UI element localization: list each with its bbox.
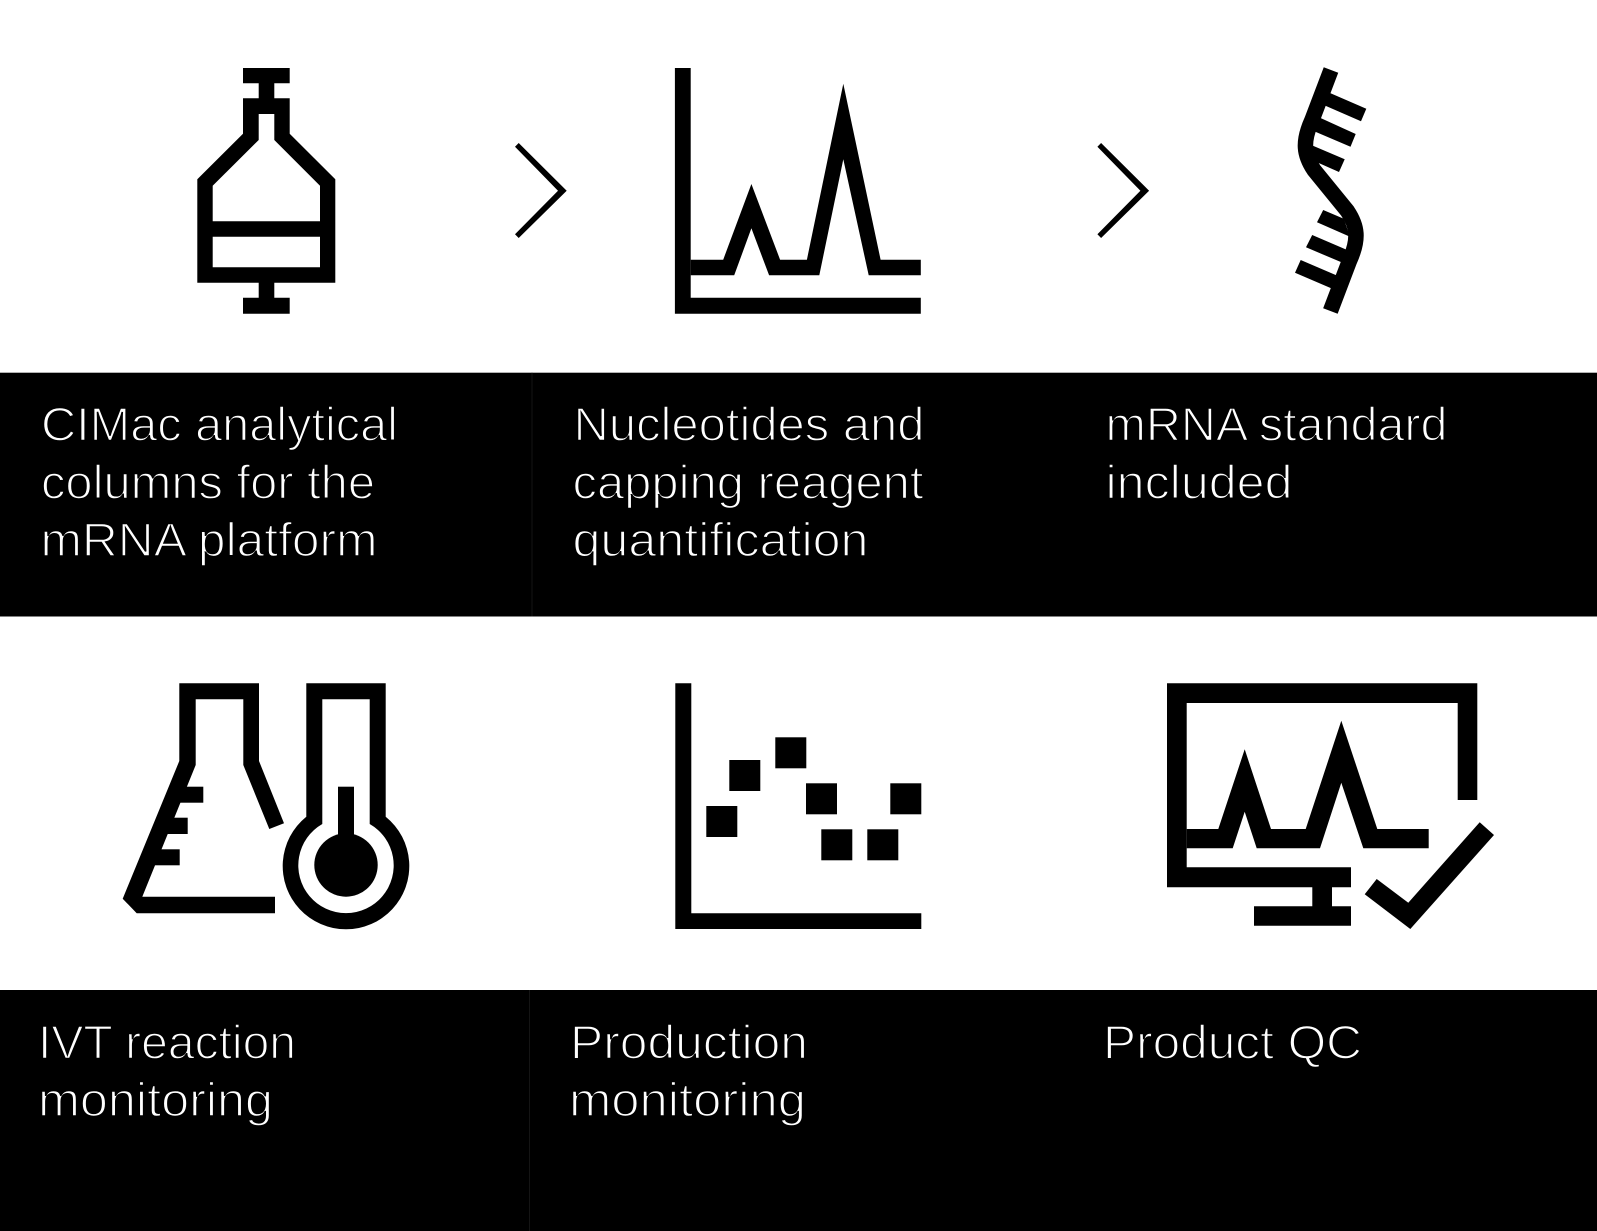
caption: CIMac analytical columns: columns for the <box>41 456 375 508</box>
icon: flask and thermometer <box>123 683 409 929</box>
caption: nucleotides and capping reagent: quantification <box>572 513 868 566</box>
caption: CIMac analytical columns: CIMac analytical <box>41 398 398 450</box>
arrow: second step to third step <box>1097 143 1149 238</box>
icon: mRNA strand <box>1295 70 1366 311</box>
caption: production monitoring: Production <box>570 1016 808 1068</box>
caption: IVT reaction monitoring <box>38 1016 296 1126</box>
caption: IVT reaction monitoring: monitoring <box>38 1073 273 1126</box>
caption: nucleotides and capping reagent: Nucleotides and <box>574 398 924 450</box>
panel: top captions band <box>0 373 1597 616</box>
caption: nucleotides and capping reagent: capping reagent <box>572 456 924 508</box>
caption: mRNA standard included: included <box>1106 456 1292 508</box>
caption: production monitoring <box>569 1016 808 1126</box>
caption: CIMac analytical columns <box>40 398 398 566</box>
caption: production monitoring: monitoring <box>569 1073 806 1126</box>
caption: mRNA standard included <box>1106 398 1448 508</box>
panel: bottom captions band <box>0 990 1597 1231</box>
arrow: first step to second step <box>515 143 567 238</box>
caption: mRNA standard included: mRNA standard <box>1106 398 1448 450</box>
icon: CIMac column <box>197 68 335 314</box>
caption: nucleotides and capping reagent <box>572 398 924 566</box>
caption: CIMac analytical columns: mRNA platform <box>40 513 378 566</box>
caption: product QC: Product QC <box>1103 1016 1362 1068</box>
icon: monitor with check mark <box>1167 683 1494 929</box>
icon: scatter plot <box>675 683 921 929</box>
caption: IVT reaction monitoring: IVT reaction <box>38 1016 296 1068</box>
icon: chromatogram <box>675 68 921 314</box>
